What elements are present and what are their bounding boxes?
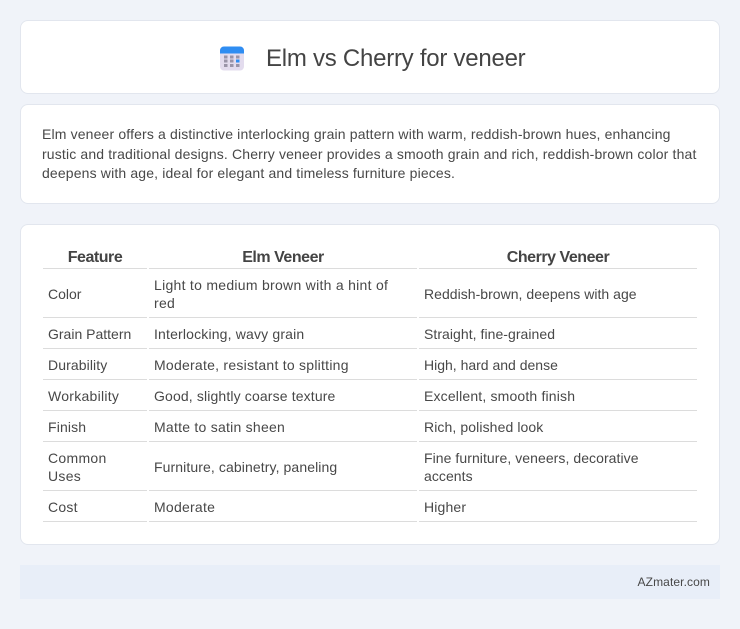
intro text: deepens with age, ideal for elegant and timeless furniture pieces. xyxy=(42,165,455,181)
panel: introduction xyxy=(20,104,720,204)
row: color: Light to medium brown with a hint of xyxy=(154,277,388,293)
intro text: Elm veneer offers a distinctive interlocking grain pattern with warm, reddish-brown hues, enhancing xyxy=(42,126,671,142)
intro text: rustic and traditional designs. Cherry veneer provides a smooth grain and rich, reddish-brown color that xyxy=(42,146,696,162)
row: workability: Excellent, smooth finish xyxy=(424,388,575,404)
footer bar xyxy=(20,565,720,599)
panel: comparison table xyxy=(20,224,720,545)
row: grain pattern: Grain Pattern xyxy=(48,326,131,342)
icon: calendar xyxy=(220,46,244,70)
row: grain pattern xyxy=(48,326,555,342)
row: common uses: Furniture, cabinetry, paneling xyxy=(154,459,337,475)
row: grain pattern: Straight, fine-grained xyxy=(424,326,555,342)
row: color xyxy=(48,277,637,311)
row: common uses: Fine furniture, veneers, decorative xyxy=(424,450,639,466)
row: finish: Finish xyxy=(48,419,86,435)
row: cost xyxy=(48,499,466,515)
table header: Elm Veneer xyxy=(242,249,324,266)
row: grain pattern: Interlocking, wavy grain xyxy=(154,326,304,342)
panel: title card xyxy=(20,20,720,94)
row: cost: Moderate xyxy=(154,499,215,515)
table header: Cherry Veneer xyxy=(507,249,609,266)
row: cost: Cost xyxy=(48,499,78,515)
row: common uses xyxy=(48,450,639,484)
row: durability: Moderate, resistant to splitting xyxy=(154,357,349,373)
row: color: red xyxy=(154,295,175,311)
row: color: Color xyxy=(48,286,81,302)
footer credit: AZmater.com xyxy=(638,575,710,589)
row: common uses: Common xyxy=(48,450,107,466)
row: durability xyxy=(48,357,558,373)
row: finish: Matte to satin sheen xyxy=(154,419,285,435)
row: color: Reddish-brown, deepens with age xyxy=(424,286,637,302)
row: workability xyxy=(48,388,575,404)
row: workability: Good, slightly coarse texture xyxy=(154,388,335,404)
table header: Feature xyxy=(68,249,122,266)
table header xyxy=(68,249,610,266)
row: common uses: Uses xyxy=(48,468,81,484)
row: common uses: accents xyxy=(424,468,473,484)
intro text xyxy=(42,126,696,181)
row: durability: Durability xyxy=(48,357,107,373)
row: workability: Workability xyxy=(48,388,119,404)
row: finish: Rich, polished look xyxy=(424,419,543,435)
row: cost: Higher xyxy=(424,499,466,515)
title: Elm vs Cherry for veneer xyxy=(266,45,525,72)
row: durability: High, hard and dense xyxy=(424,357,558,373)
row: finish xyxy=(48,419,544,435)
